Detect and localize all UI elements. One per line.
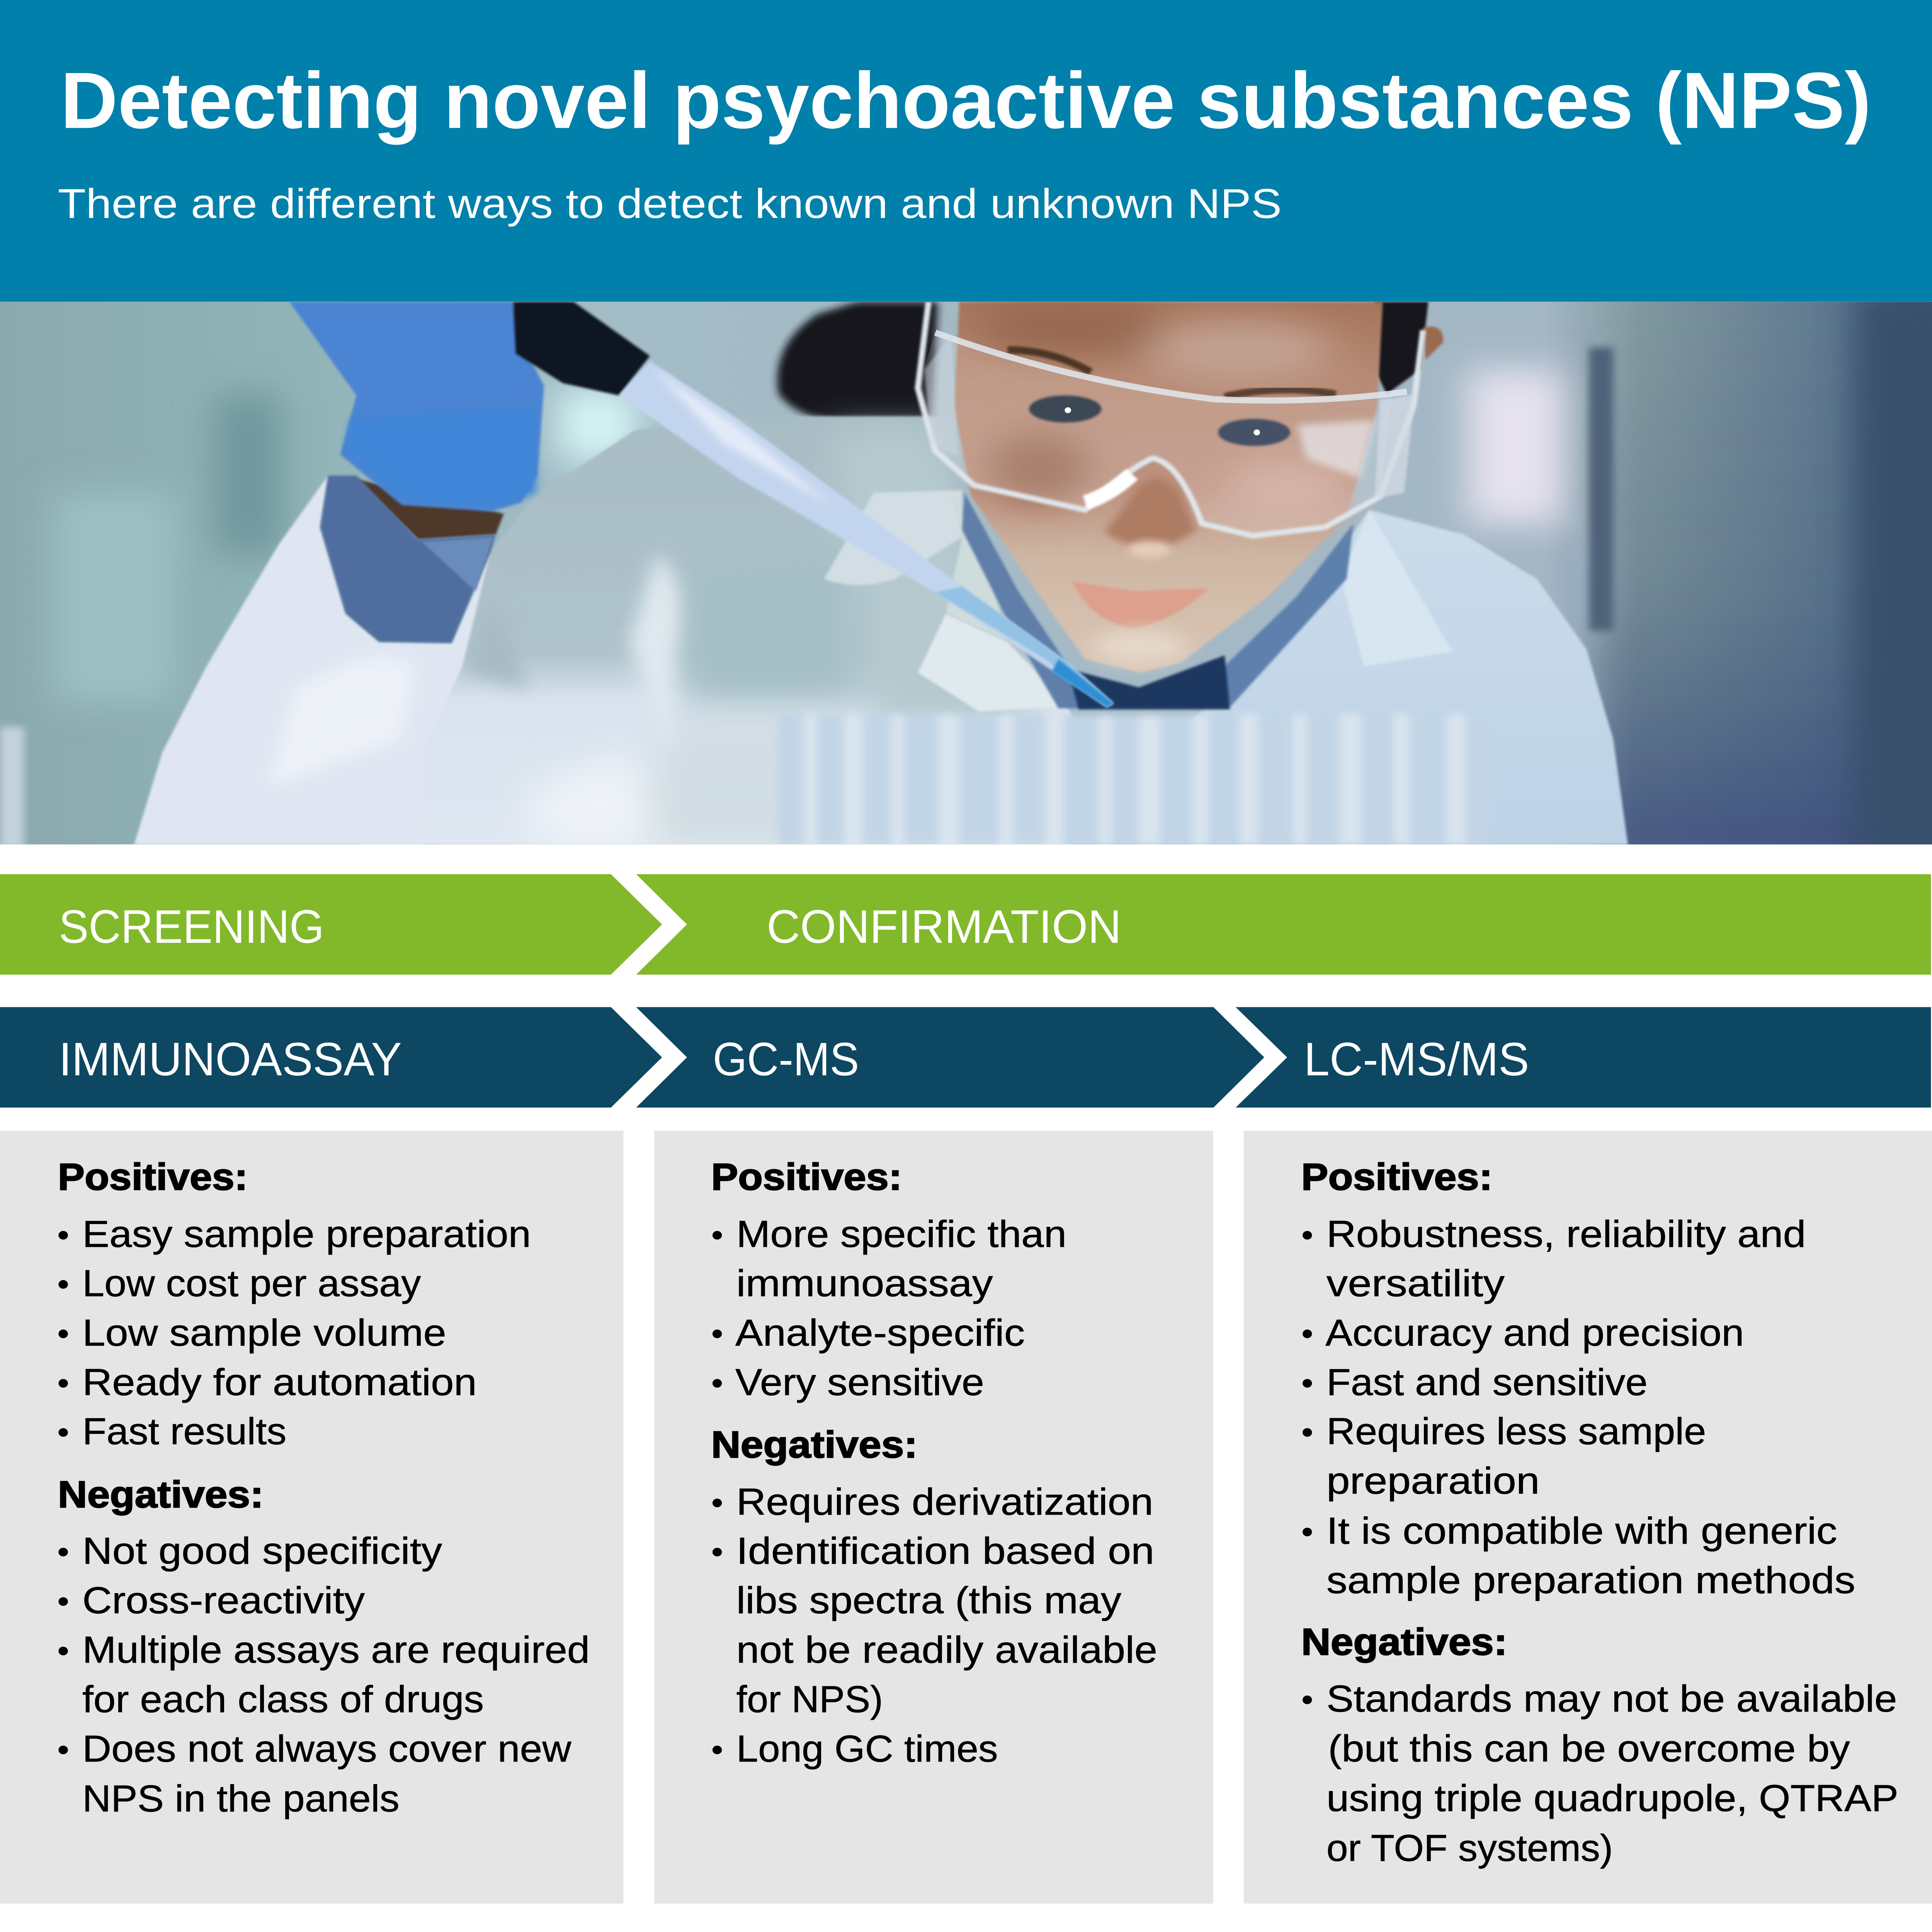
pipette handle — [513, 302, 650, 395]
list: negatives: Multiple assays are required — [82, 1629, 590, 1671]
list: negatives: (but this can be overcome by — [1328, 1727, 1850, 1769]
lab coat: shading — [536, 431, 1032, 845]
panel: immunoassay — [0, 1131, 623, 1903]
shirt cuff — [320, 476, 496, 643]
list: negatives: Identification based on — [736, 1530, 1154, 1572]
band: screening — [0, 874, 662, 975]
arrow label: immunoassay: IMMUNOASSAY — [59, 1033, 402, 1085]
header band — [0, 0, 1932, 302]
face — [954, 302, 1383, 673]
lips — [1072, 582, 1209, 628]
photo: scientist pipetting into test tubes — [0, 289, 1932, 869]
list: negatives: Not good specificity — [82, 1530, 442, 1572]
heading: positives: Positives: — [58, 1156, 248, 1198]
pipette shaft — [619, 361, 1114, 707]
list: negatives: or TOF systems) — [1327, 1827, 1613, 1869]
arrow: immunoassay — [0, 1007, 662, 1107]
nose — [1104, 478, 1197, 548]
list: negatives: not be readily available — [736, 1629, 1157, 1671]
arrow: lc-ms/ms — [1236, 1007, 1931, 1107]
pipette liquid — [935, 586, 1114, 707]
shirt under coat — [962, 493, 1085, 708]
goggles — [918, 302, 1423, 536]
list: positives: sample preparation methods — [1327, 1559, 1855, 1601]
eyes — [1029, 395, 1101, 422]
list: positives: immunoassay — [736, 1262, 993, 1304]
list: negatives — [58, 1530, 590, 1820]
wrist — [356, 479, 504, 539]
coat fold highlight — [630, 554, 680, 752]
list: negatives: Does not always cover new — [82, 1728, 571, 1770]
list: positives: Low cost per assay — [82, 1262, 421, 1304]
subtitle: There are different ways to detect known and unknown NPS — [58, 180, 1282, 227]
list: positives: More specific than — [736, 1213, 1066, 1255]
heading: positives: Positives: — [1301, 1156, 1493, 1198]
arrow: gc-ms — [636, 1007, 1264, 1107]
band label: screening: SCREENING — [59, 900, 324, 953]
heading: negatives: Negatives: — [1301, 1621, 1507, 1663]
list: positives: It is compatible with generic — [1327, 1510, 1837, 1552]
list: negatives: libs spectra (this may — [736, 1579, 1121, 1621]
list: positives: preparation — [1327, 1460, 1540, 1502]
lab coat: right side — [1058, 510, 1628, 845]
panel: lc-ms/ms — [1244, 1131, 1932, 1903]
list: positives — [58, 1213, 531, 1452]
list: negatives: using triple quadrupole, QTRAP — [1327, 1777, 1898, 1819]
list: negatives — [713, 1481, 1157, 1770]
list: negatives: for NPS) — [736, 1678, 883, 1720]
list: negatives: Standards may not be available — [1327, 1678, 1897, 1720]
band: confirmation — [636, 874, 1931, 975]
arrow label: gc-ms: GC-MS — [713, 1033, 859, 1085]
list: negatives — [1303, 1678, 1898, 1869]
glove — [289, 302, 544, 511]
list: positives: Fast and sensitive — [1327, 1361, 1648, 1403]
heading: negatives: Negatives: — [58, 1473, 264, 1515]
heading: negatives: Negatives: — [711, 1423, 918, 1466]
collar left — [824, 490, 962, 585]
face shading — [978, 299, 1347, 525]
eyebrows — [1008, 350, 1091, 372]
list: positives: Robustness, reliability and — [1327, 1213, 1806, 1255]
test tube rack — [779, 714, 1491, 845]
list: positives: Low sample volume — [82, 1311, 446, 1354]
list: negatives: Long GC times — [736, 1728, 998, 1770]
list: positives: Fast results — [82, 1410, 286, 1452]
list: positives: Easy sample preparation — [82, 1213, 531, 1255]
list: negatives: Cross-reactivity — [82, 1579, 365, 1621]
lapel right — [1341, 510, 1452, 667]
list: positives: Ready for automation — [82, 1361, 477, 1403]
hair — [777, 302, 938, 421]
list: negatives: for each class of drugs — [82, 1678, 484, 1720]
list: positives: Accuracy and precision — [1325, 1311, 1744, 1354]
band label: confirmation: CONFIRMATION — [767, 900, 1121, 953]
list: positives — [1303, 1213, 1855, 1601]
chin highlight — [1092, 631, 1186, 663]
background details — [0, 347, 1613, 850]
lab coat: raised sleeve — [134, 476, 490, 845]
list: negatives: Requires derivatization — [736, 1481, 1153, 1523]
panel: gc-ms — [654, 1131, 1213, 1903]
list: positives: versatility — [1327, 1262, 1505, 1304]
list: positives — [713, 1213, 1066, 1403]
list: positives: Very sensitive — [735, 1361, 984, 1403]
arrow label: lc-ms/ms: LC-MS/MS — [1304, 1033, 1529, 1085]
list: positives: Analyte-specific — [735, 1311, 1025, 1354]
list: negatives: NPS in the panels — [82, 1777, 400, 1820]
ear — [1423, 327, 1443, 360]
list: positives: Requires less sample — [1327, 1410, 1706, 1452]
lab coat: torso — [362, 417, 1072, 845]
heading: positives: Positives: — [711, 1156, 902, 1198]
